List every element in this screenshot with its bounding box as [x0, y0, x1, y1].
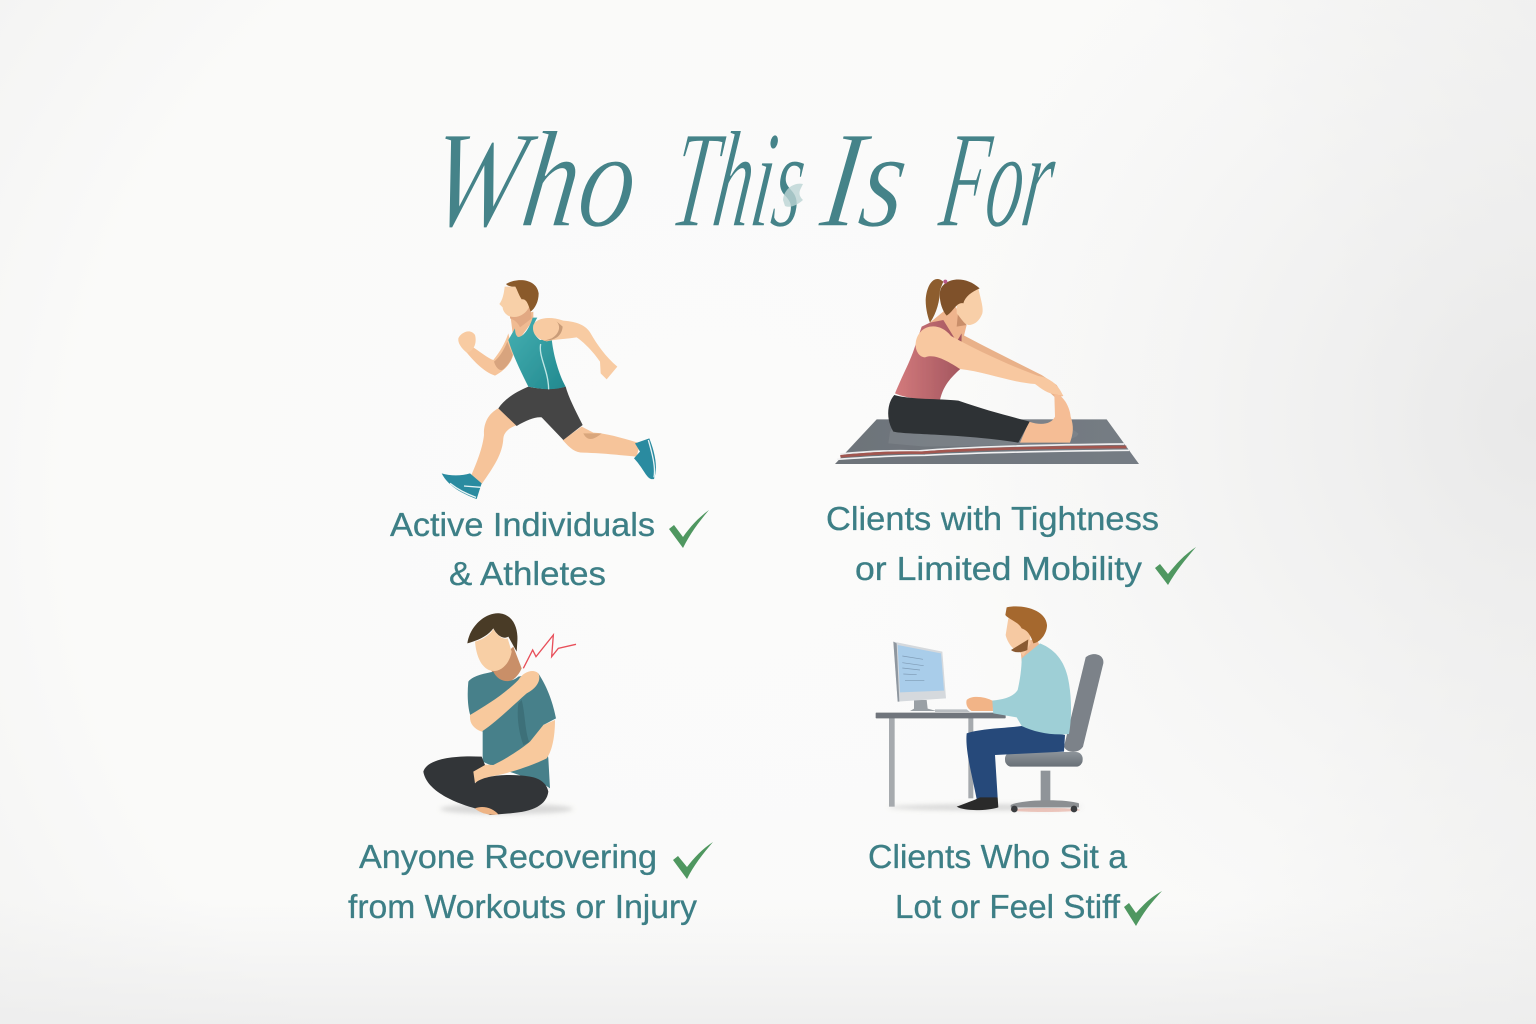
runner hair — [506, 280, 539, 312]
neck — [490, 647, 522, 683]
title: Who — [421, 103, 647, 256]
item: recovering from workouts or injury: Anyone Recovering — [359, 838, 657, 875]
chest and neck — [925, 303, 967, 345]
shoe — [957, 797, 998, 810]
runner shoes — [442, 438, 656, 499]
icon: check mark — [1155, 547, 1196, 585]
leggings — [888, 395, 1030, 443]
runner back leg — [470, 408, 517, 484]
runner tank top — [508, 318, 566, 389]
ground shadow — [440, 804, 573, 814]
runner neck — [510, 305, 532, 327]
runner face — [499, 287, 530, 317]
item: sit a lot or feel stiff: Clients Who Sit a — [868, 838, 1128, 875]
title: Is — [813, 103, 917, 256]
caster glow — [1010, 808, 1080, 812]
runner front arm — [533, 318, 617, 379]
title: This — [664, 103, 815, 256]
neck — [1020, 638, 1040, 662]
item: tightness or limited mobility — [826, 500, 1196, 587]
item: active individuals and athletes — [390, 506, 709, 592]
keyboard — [935, 709, 970, 712]
runner shorts — [498, 387, 583, 440]
item: tightness or limited mobility: or Limited Mobility — [855, 550, 1143, 587]
face — [1006, 618, 1031, 656]
item: active individuals and athletes: Active Individuals — [390, 506, 655, 543]
neck shade — [957, 310, 967, 327]
icon: title paint smudge — [783, 184, 803, 207]
runner shoulder shade — [543, 320, 563, 341]
trousers — [966, 726, 1065, 799]
illustration: runner — [442, 280, 656, 499]
hair — [467, 613, 517, 652]
shirt — [992, 643, 1071, 734]
item: tightness or limited mobility: Clients with Tightness — [826, 500, 1159, 537]
item: active individuals and athletes: & Athletes — [449, 555, 606, 592]
title — [421, 103, 1065, 256]
yoga mat — [835, 419, 1139, 464]
hair — [940, 279, 980, 316]
hand — [966, 697, 993, 711]
ponytail — [926, 279, 943, 323]
monitor — [893, 642, 946, 711]
t-shirt — [468, 672, 556, 788]
item: sit a lot or feel stiff: Lot or Feel Stiff — [895, 888, 1121, 925]
chair — [1005, 654, 1103, 812]
hair tie — [943, 280, 947, 284]
runner chest skin — [511, 312, 533, 338]
item: sit a lot or feel stiff — [868, 838, 1162, 926]
resting arm — [473, 720, 555, 783]
raised arm — [470, 671, 539, 732]
face — [957, 288, 983, 325]
runner upper arm shade — [494, 342, 513, 370]
foot — [475, 807, 498, 815]
runner front leg — [563, 427, 640, 457]
near arm — [916, 326, 1063, 396]
runner knee shade — [583, 433, 602, 439]
icon: check mark — [673, 842, 713, 879]
pain bolt — [523, 635, 576, 668]
far arm — [958, 333, 1063, 397]
crossed legs — [423, 756, 548, 815]
hair — [1005, 606, 1047, 643]
desk top — [876, 713, 1006, 718]
illustration: seated forward stretch on mat — [835, 279, 1139, 464]
desk legs — [889, 717, 973, 807]
runner fist — [458, 331, 476, 353]
title: For — [932, 103, 1065, 256]
icon: check mark — [1124, 891, 1162, 926]
icon: check mark — [669, 510, 709, 548]
runner back arm — [466, 333, 513, 376]
face — [475, 629, 512, 671]
runner tank seam — [540, 344, 549, 389]
beard — [1011, 639, 1028, 652]
item: recovering from workouts or injury: from Workouts or Injury — [348, 888, 698, 925]
item: recovering from workouts or injury — [348, 838, 713, 925]
foot — [1020, 394, 1073, 443]
shirt fold shade — [518, 700, 529, 745]
illustration: person sitting at computer desk — [876, 606, 1103, 812]
runner shoe stripes — [450, 440, 655, 497]
tank top — [895, 320, 962, 400]
illustration: seated person with shoulder pain — [423, 613, 576, 815]
floor shadow — [888, 804, 1082, 810]
